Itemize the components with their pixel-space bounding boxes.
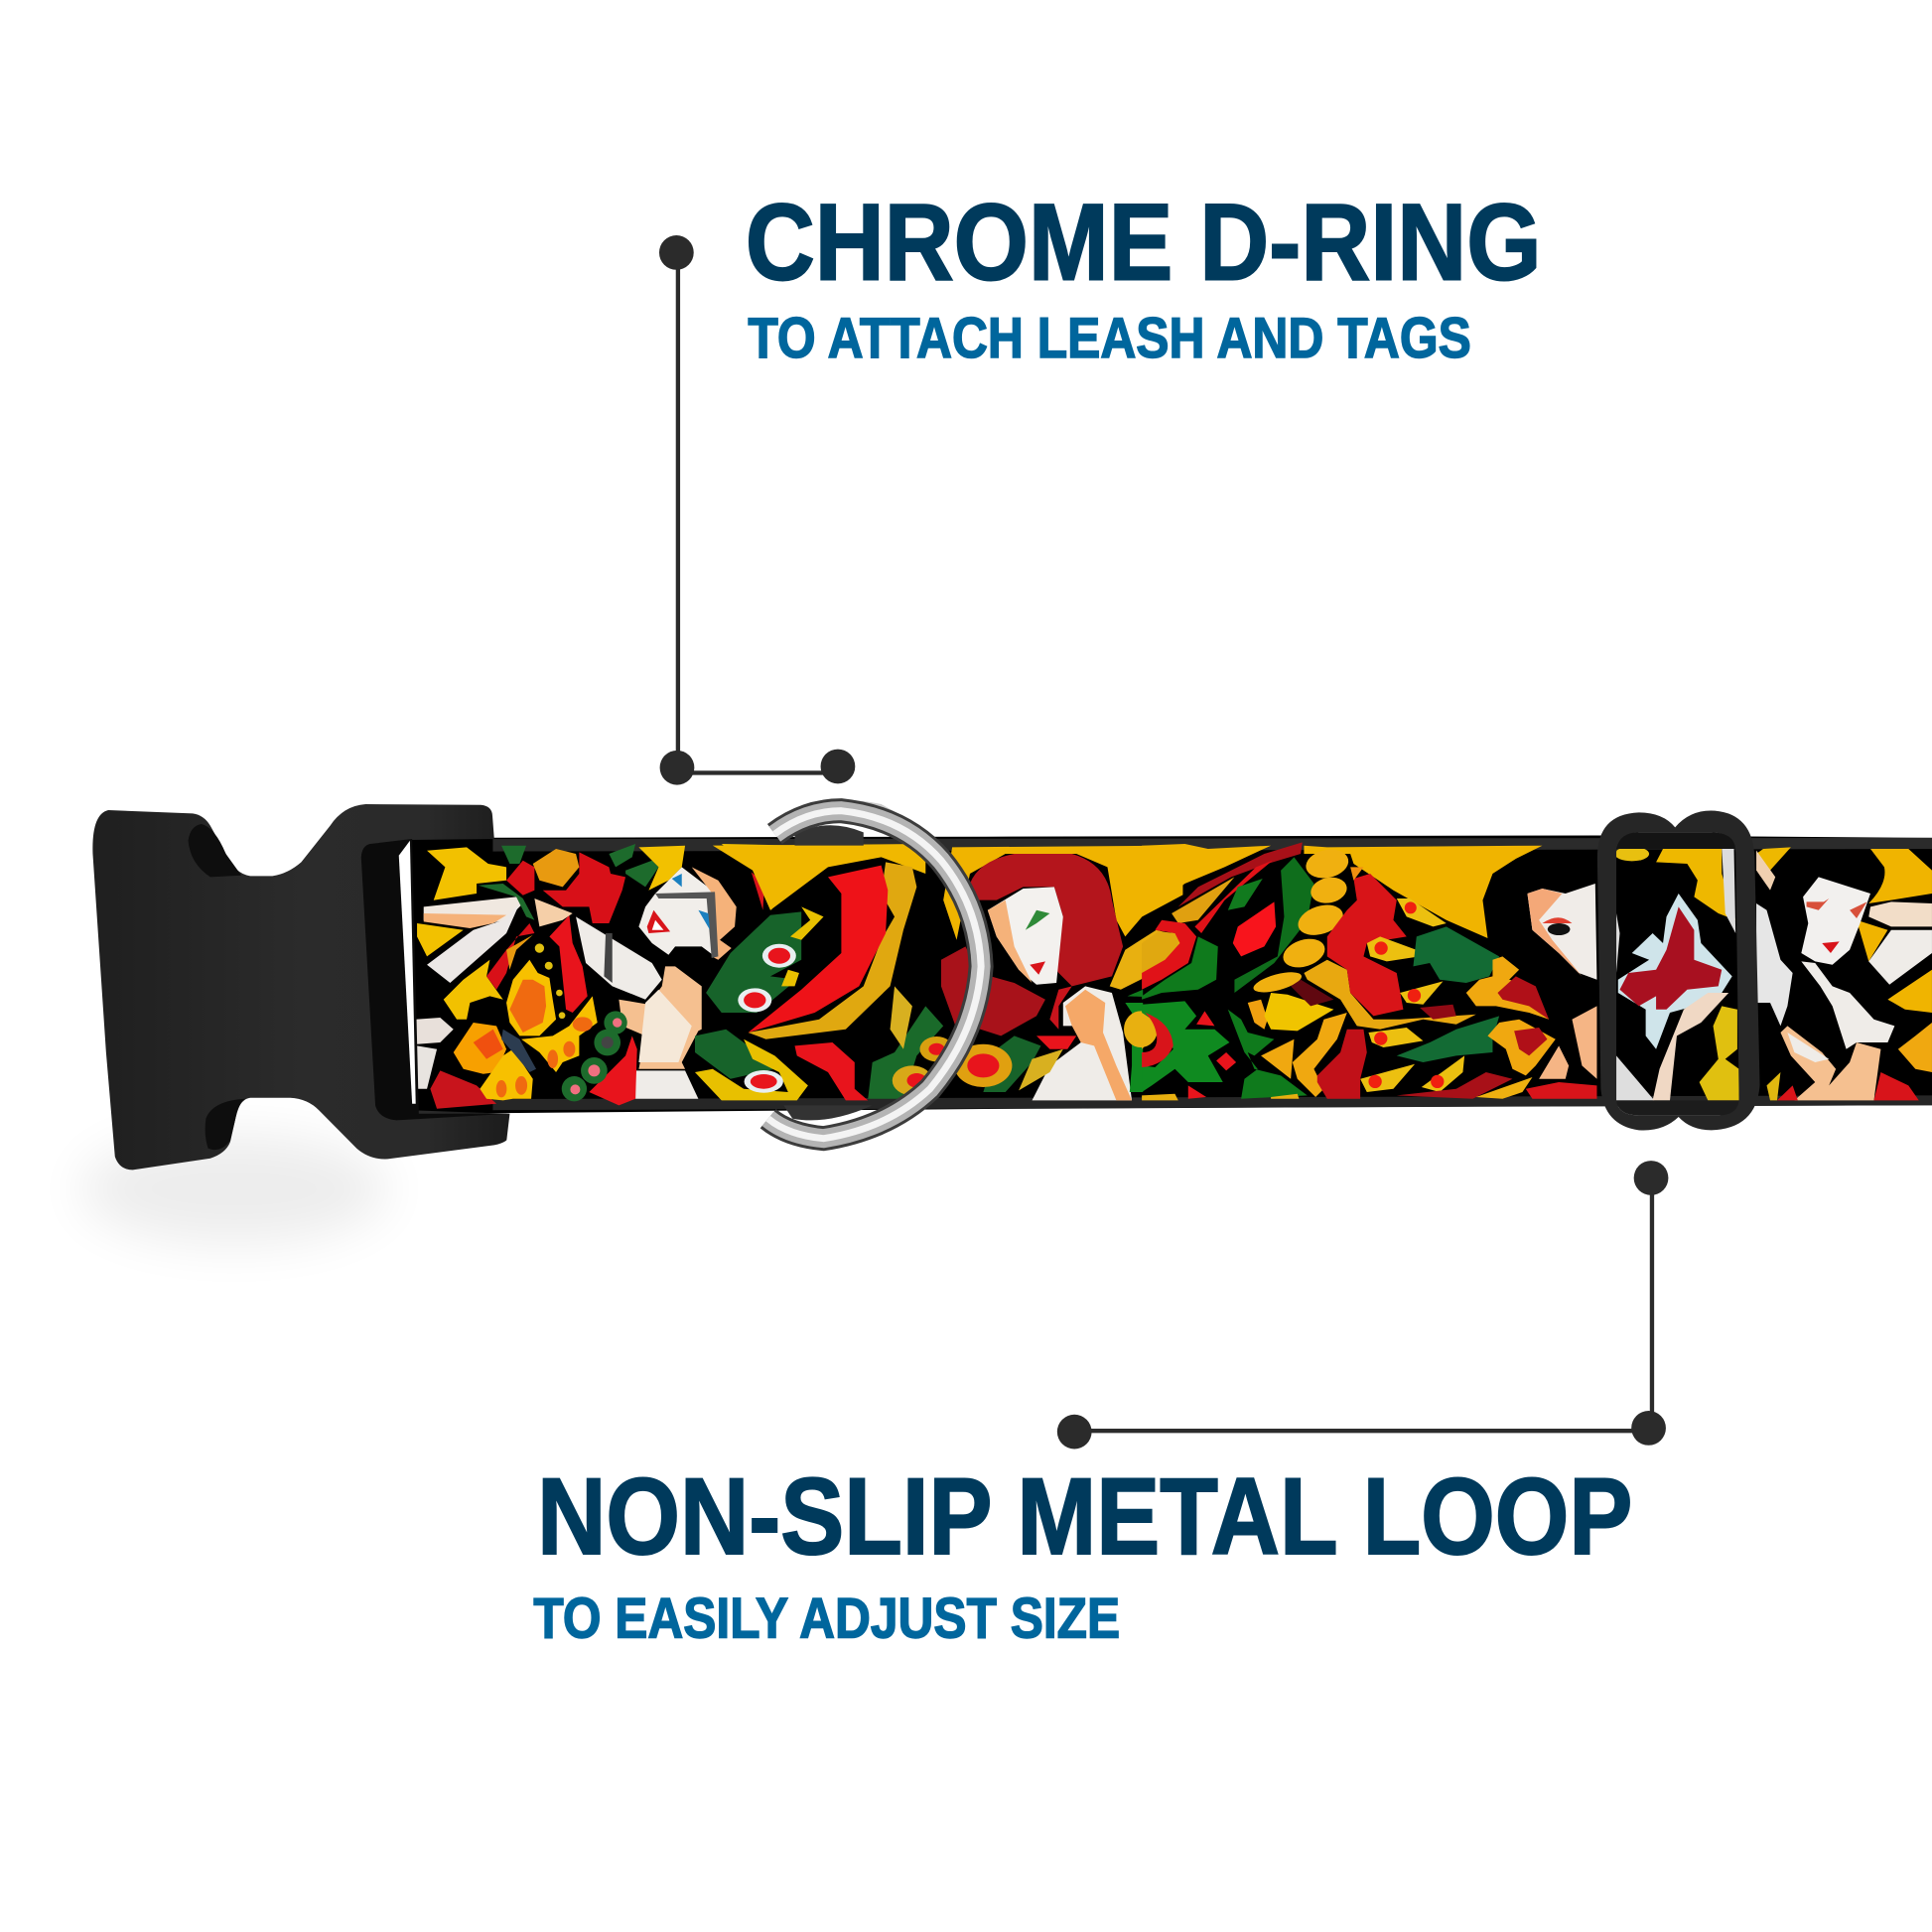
- heading: chrome d-ring: [746, 183, 1542, 370]
- right fairy: [1756, 847, 1932, 1100]
- wing scales: [1252, 846, 1351, 997]
- callout line: d-ring: [659, 235, 855, 785]
- fabric pattern: butterfly wings and red-haired fairy: [695, 844, 1182, 1100]
- buckle: [92, 804, 509, 1170]
- subheading: leash and tags: TO ATTACH LEASH AND TAGS: [748, 307, 1471, 370]
- butterfly on fabric: [454, 960, 598, 1100]
- callout line: metal loop: [1057, 1161, 1668, 1449]
- buckle shadow: [80, 1134, 388, 1244]
- heading: non-slip metal loop: NON-SLIP METAL LOOP: [537, 1456, 1632, 1578]
- fairy face: [638, 867, 737, 960]
- yellow wing drops: [1360, 898, 1464, 1092]
- slider contents: [1614, 846, 1739, 1100]
- bead chain: [562, 1011, 627, 1101]
- red wing flower: [1327, 874, 1407, 1016]
- non-slip loop slider: [1597, 811, 1760, 1131]
- heading: chrome d-ring: CHROME D-RING: [746, 183, 1542, 304]
- fabric pattern: slider contents and right fairy: [1614, 846, 1932, 1100]
- subheading: adjust size: TO EASILY ADJUST SIZE: [533, 1587, 1120, 1650]
- heading: non-slip metal loop: [533, 1456, 1632, 1650]
- rose: [479, 844, 658, 923]
- dark-haired fairy face: [1527, 884, 1596, 980]
- fabric pattern: large wing and dark-haired fairy profile: [1142, 842, 1596, 1100]
- fabric pattern: left fairy and butterfly: [415, 844, 804, 1109]
- collar strap: [407, 835, 1932, 1114]
- chrome d-ring: [768, 800, 981, 1139]
